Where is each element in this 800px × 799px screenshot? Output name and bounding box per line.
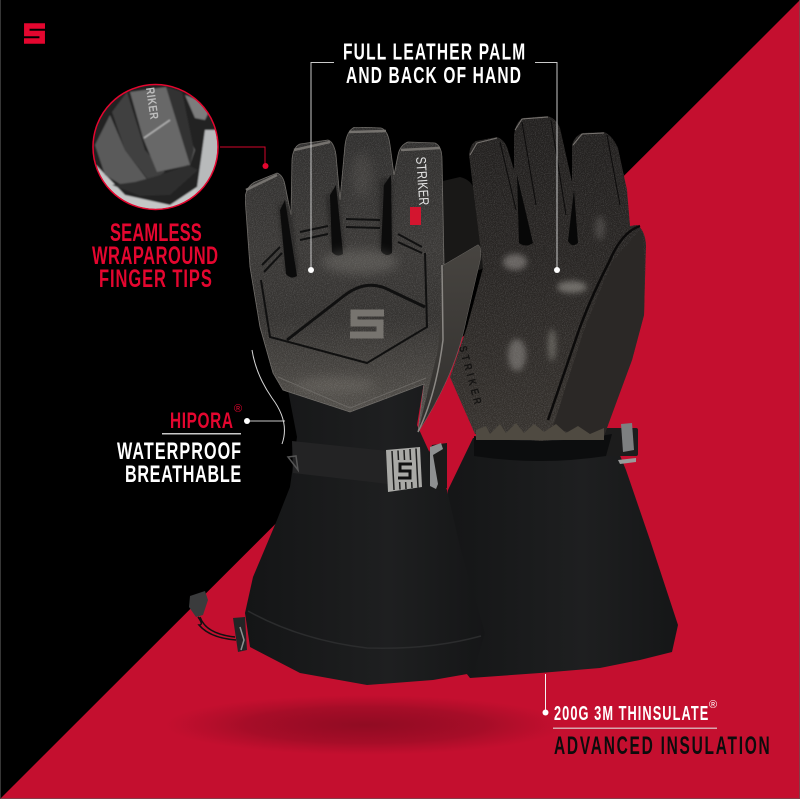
back of hand logo	[350, 313, 384, 335]
strap buckle	[428, 443, 447, 490]
callout: finger tips inset	[90, 80, 268, 215]
gauntlet hem seam	[248, 611, 481, 648]
callout: hipora	[117, 350, 285, 488]
thinsulate divider	[553, 728, 717, 729]
glove shadow on floor	[165, 695, 565, 755]
striker brand mark	[410, 156, 432, 225]
hipora label: HIPORA	[170, 409, 233, 434]
left gauntlet	[245, 382, 485, 685]
finger seams and rim lights	[470, 117, 620, 215]
hipora benefits: WATERPROOF	[117, 438, 241, 465]
registered mark: ®	[709, 699, 717, 711]
thinsulate leader	[544, 674, 546, 712]
drawcord toggle and clip	[189, 591, 247, 652]
cuff seam	[278, 377, 426, 408]
hipora benefits	[117, 438, 241, 488]
strap loop	[288, 456, 298, 470]
callout: thinsulate	[542, 674, 770, 760]
leader line: back of hand	[308, 62, 334, 273]
hipora divider	[162, 433, 241, 434]
wrist strap	[292, 441, 388, 484]
back thumb behind palm	[443, 177, 484, 285]
hipora curve	[252, 350, 284, 444]
thumb leather shade	[552, 230, 644, 436]
palm leather	[450, 116, 646, 441]
hipora dot	[244, 418, 250, 424]
palm finger slits	[517, 175, 578, 246]
palm highlights	[503, 216, 605, 371]
inset connector	[220, 147, 265, 165]
heading: seamless wraparound finger tips: WRAPAROUND	[92, 243, 218, 270]
advanced insulation: ADVANCED INSULATION	[554, 732, 770, 760]
right gauntlet	[440, 436, 678, 678]
brand logo	[24, 26, 45, 41]
striker brand mark: STRIKER	[413, 156, 432, 206]
thumb seam	[548, 226, 640, 420]
finger slit shading	[284, 180, 386, 272]
inset glove text: RIKER	[143, 87, 160, 120]
left glove (back of hand)	[189, 127, 485, 685]
heading: full leather palm: AND BACK OF HAND	[346, 63, 521, 89]
strap tag with logo	[386, 447, 422, 492]
knuckle ridges	[262, 219, 422, 272]
thumb side rim	[418, 265, 443, 432]
registered mark: ®	[234, 403, 242, 415]
finger tip light caps	[246, 131, 440, 190]
leather back of hand	[245, 127, 481, 432]
heading: full leather palm	[343, 39, 525, 89]
finger slits	[280, 175, 392, 278]
thinsulate dot	[542, 710, 548, 716]
leather sheen	[295, 153, 398, 393]
heading: seamless wraparound finger tips: SEAMLESS	[110, 220, 202, 247]
hand panel stitching and diamond	[261, 253, 427, 363]
hipora benefits: BREATHABLE	[125, 461, 241, 488]
connector dot	[262, 163, 268, 169]
thinsulate label: 200G 3M THINSULATE	[554, 702, 708, 725]
heading: seamless wraparound finger tips: FINGER TIPS	[99, 266, 212, 293]
heading: full leather palm: FULL LEATHER PALM	[343, 39, 525, 65]
gathered wrist ruffle	[476, 423, 604, 440]
side embossed brand: STRIKER	[456, 345, 483, 406]
leader line: palm	[535, 62, 560, 273]
inset photo	[94, 85, 218, 209]
right wrist strap and buckle	[602, 423, 638, 464]
hipora leader	[247, 420, 285, 422]
right glove (palm side)	[440, 116, 678, 678]
inset ring	[93, 84, 218, 210]
heading: seamless wraparound finger tips	[92, 220, 218, 293]
thumb leather	[418, 245, 481, 432]
right cinch band	[474, 434, 612, 461]
